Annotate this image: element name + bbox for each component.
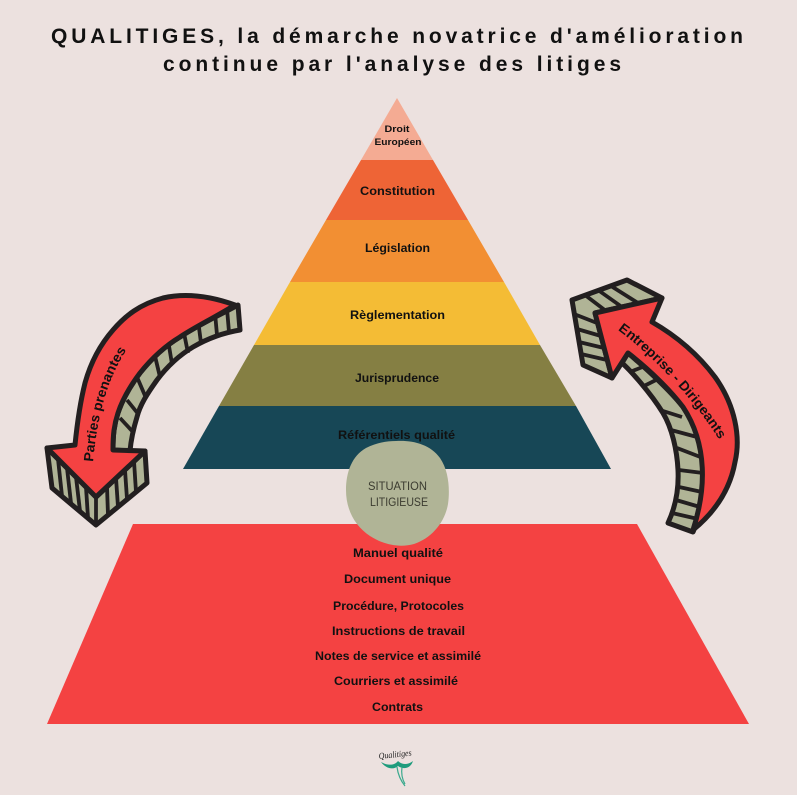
pyramid level: Législation: [290, 220, 504, 282]
blob: situation litigieuse: LITIGIEUSE: [370, 495, 428, 509]
arrow shaft side: [113, 305, 240, 451]
pyramid level: Droit Européen: Droit: [384, 124, 410, 134]
document list: Notes de service et assimilé: [315, 649, 481, 663]
title: [51, 25, 743, 76]
document list: Procédure, Protocoles: [333, 599, 464, 613]
pyramid level: Droit Européen: Européen: [374, 137, 422, 147]
trapezoid of internal documents: [47, 524, 749, 724]
hatching: [574, 286, 703, 519]
pyramid level: Référentiels qualité: Référentiels qualité: [338, 428, 455, 442]
pyramid level: Règlementation: [254, 282, 540, 345]
hatching: [58, 309, 229, 525]
arrow label: Entreprise - Dirigeants: [618, 323, 724, 438]
pyramid level: Droit Européen: [361, 98, 433, 160]
arrow head side: [572, 280, 662, 378]
document list: Instructions de travail: [332, 624, 465, 638]
logo: Qualitiges: Qualitiges: [378, 748, 412, 761]
arrow label: Parties prenantes: [84, 348, 126, 461]
pyramid level: Règlementation: Règlementation: [350, 308, 445, 322]
blob: situation litigieuse: SITUATION: [368, 479, 427, 493]
arrow: Parties prenantes: [44, 293, 242, 528]
document list: Document unique: [344, 572, 451, 586]
document list: Contrats: [372, 700, 423, 714]
blob: situation litigieuse: [346, 441, 449, 546]
pyramid level: Constitution: [326, 160, 468, 220]
arrow: Entreprise - Dirigeants: [570, 278, 740, 534]
pyramid level: Législation: Législation: [365, 241, 430, 255]
arrow face: [47, 296, 235, 497]
title: continue par l'analyse des litiges: [163, 53, 621, 76]
logo: Qualitiges: [378, 748, 413, 786]
document list: Courriers et assimilé: [334, 674, 458, 688]
pyramid of legal norms: [183, 98, 611, 469]
arrow head side: [47, 448, 147, 525]
arrow shaft side: [622, 353, 704, 532]
document list: [315, 546, 481, 714]
pyramid level: Jurisprudence: Jurisprudence: [355, 371, 439, 385]
pyramid level: Jurisprudence: [219, 345, 576, 406]
document list: Manuel qualité: [353, 546, 443, 560]
pyramid level: Constitution: Constitution: [360, 184, 435, 198]
pyramid level: Référentiels qualité: [183, 406, 611, 469]
title: QUALITIGES, la démarche novatrice d'amélioration: [51, 25, 743, 48]
arrow face: [595, 298, 737, 530]
